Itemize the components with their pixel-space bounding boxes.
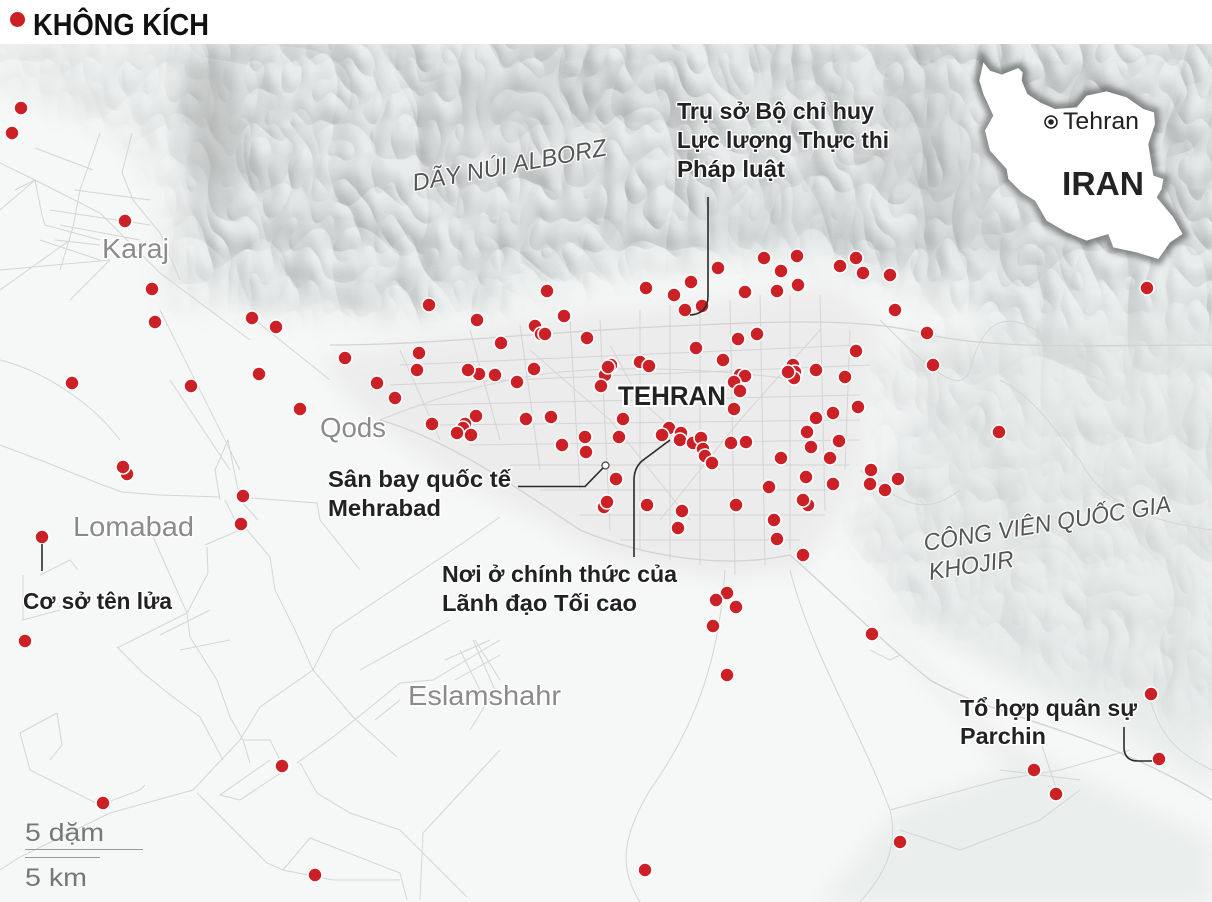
legend dot: red air strike marker [10, 12, 25, 27]
leader: law enforcement HQ [690, 197, 708, 315]
label: Mehrabad airport: Mehrabad [328, 495, 441, 521]
label: supreme leader residence: Lãnh đạo Tối cao [442, 590, 637, 616]
label: Mehrabad airport [328, 466, 511, 521]
label: Mehrabad airport: Sân bay quốc tế [328, 466, 511, 492]
label: Parchin [960, 695, 1137, 749]
label: supreme leader residence [442, 561, 677, 616]
leader: Parchin [1124, 727, 1152, 761]
label: Parchin: Tổ hợp quân sự [960, 695, 1137, 721]
label: supreme leader residence: Nơi ở chính thức của [442, 561, 677, 587]
inset locator map: Iran [979, 62, 1183, 259]
label: Lomabad: Lomabad [73, 511, 194, 542]
inset soft shadow [979, 62, 1183, 259]
Iran country shape [979, 62, 1183, 259]
label: Qods: Qods [320, 412, 386, 443]
inset label Tehran: Tehran [1063, 108, 1139, 135]
leader: supreme leader residence [634, 440, 670, 557]
label: missile site: Cơ sở tên lửa [23, 588, 172, 614]
label: Khojir national park: KHOJIR [927, 546, 1016, 586]
scale lines [25, 850, 143, 858]
place labels [73, 134, 1173, 711]
title text: KHÔNG KÍCH [33, 6, 209, 42]
inset label IRAN: IRAN [1062, 165, 1144, 202]
label: Khojir national park: CÔNG VIÊN QUỐC GIA [922, 490, 1173, 557]
label: Alborz mountains: DÃY NÚI ALBORZ [410, 134, 610, 197]
scale text: miles: 5 dặm [25, 819, 104, 847]
label: Karaj: Karaj [102, 233, 169, 264]
title [10, 6, 209, 42]
urban area [320, 285, 880, 580]
terrain relief [0, 44, 1212, 722]
label: Parchin: Parchin [960, 723, 1046, 749]
label: law enforcement HQ: Pháp luật [677, 156, 785, 182]
label: law enforcement HQ: Lực lượng Thực thi [677, 127, 889, 153]
label: law enforcement HQ: Trụ sở Bộ chỉ huy [677, 98, 874, 124]
leader: Mehrabad airport [518, 468, 603, 486]
label: law enforcement HQ [677, 98, 889, 182]
Tehran marker in inset [1045, 116, 1057, 128]
marker: Mehrabad airport [602, 462, 609, 469]
southeast pale tint [820, 300, 1212, 902]
label: Eslamshahr: Eslamshahr [408, 680, 561, 711]
label: TEHRAN: TEHRAN [618, 381, 726, 411]
scale bar [25, 819, 143, 892]
leader: missile site [41, 544, 43, 571]
label: Khojir national park [922, 490, 1173, 586]
annotations [23, 98, 1152, 761]
scale text: km: 5 km [25, 864, 87, 892]
